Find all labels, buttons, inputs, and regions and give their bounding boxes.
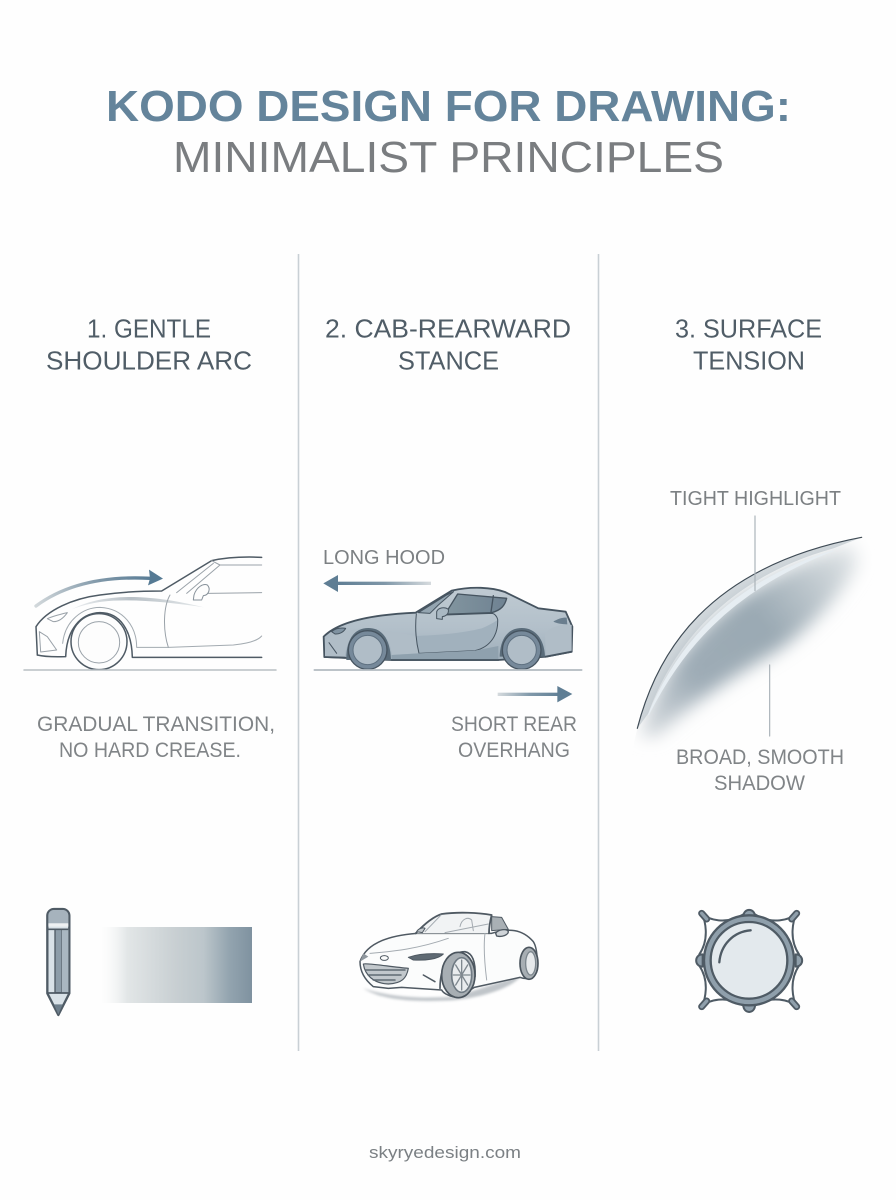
heading: surface tension: TENSION: [693, 346, 805, 376]
surface curve diagram: [637, 516, 862, 737]
panel: gentle shoulder arc: [24, 314, 276, 1015]
arrow: short rear overhang: [498, 686, 572, 702]
arc arrow: [36, 570, 163, 606]
label: long hood: LONG HOOD: [323, 547, 445, 569]
heading: surface tension: [675, 314, 822, 376]
title: MINIMALIST PRINCIPLES: [173, 133, 724, 182]
title: [106, 82, 791, 182]
heading: cab-rearward stance: STANCE: [398, 346, 499, 376]
label: short rear overhang: SHORT REAR: [451, 713, 577, 736]
caption: GRADUAL TRANSITION,: [37, 713, 275, 736]
solid car side view with arrows: [314, 575, 582, 702]
label: broad smooth shadow: [676, 746, 844, 795]
caption: [37, 713, 275, 762]
panel: surface tension: [637, 314, 862, 1012]
title: KODO DESIGN FOR DRAWING:: [106, 82, 791, 131]
icon: pencil: [47, 909, 69, 1015]
icon: roadster sketch: [360, 913, 538, 1001]
label: broad smooth shadow: SHADOW: [714, 772, 805, 795]
heading: surface tension: 3. SURFACE: [675, 314, 822, 344]
icon: tension ring: [696, 910, 802, 1012]
label: tight highlight: TIGHT HIGHLIGHT: [670, 488, 841, 510]
heading: gentle shoulder arc: SHOULDER ARC: [46, 346, 252, 376]
label: short rear overhang: [451, 713, 577, 762]
gradient swatch: [100, 927, 252, 1003]
heading: gentle shoulder arc: [46, 314, 252, 376]
car side line drawing with arc arrow: [24, 557, 276, 670]
panel: cab-rearward stance: [314, 314, 582, 1001]
label: broad smooth shadow: BROAD, SMOOTH: [676, 746, 844, 769]
heading: cab-rearward stance: [325, 314, 571, 376]
arrow: long hood: [323, 575, 431, 592]
footer url: skyryedesign.com: [369, 1144, 521, 1162]
label: short rear overhang: OVERHANG: [458, 739, 570, 762]
heading: gentle shoulder arc: 1. GENTLE: [87, 314, 211, 344]
caption: NO HARD CREASE.: [59, 739, 241, 762]
heading: cab-rearward stance: 2. CAB-REARWARD: [325, 314, 571, 344]
